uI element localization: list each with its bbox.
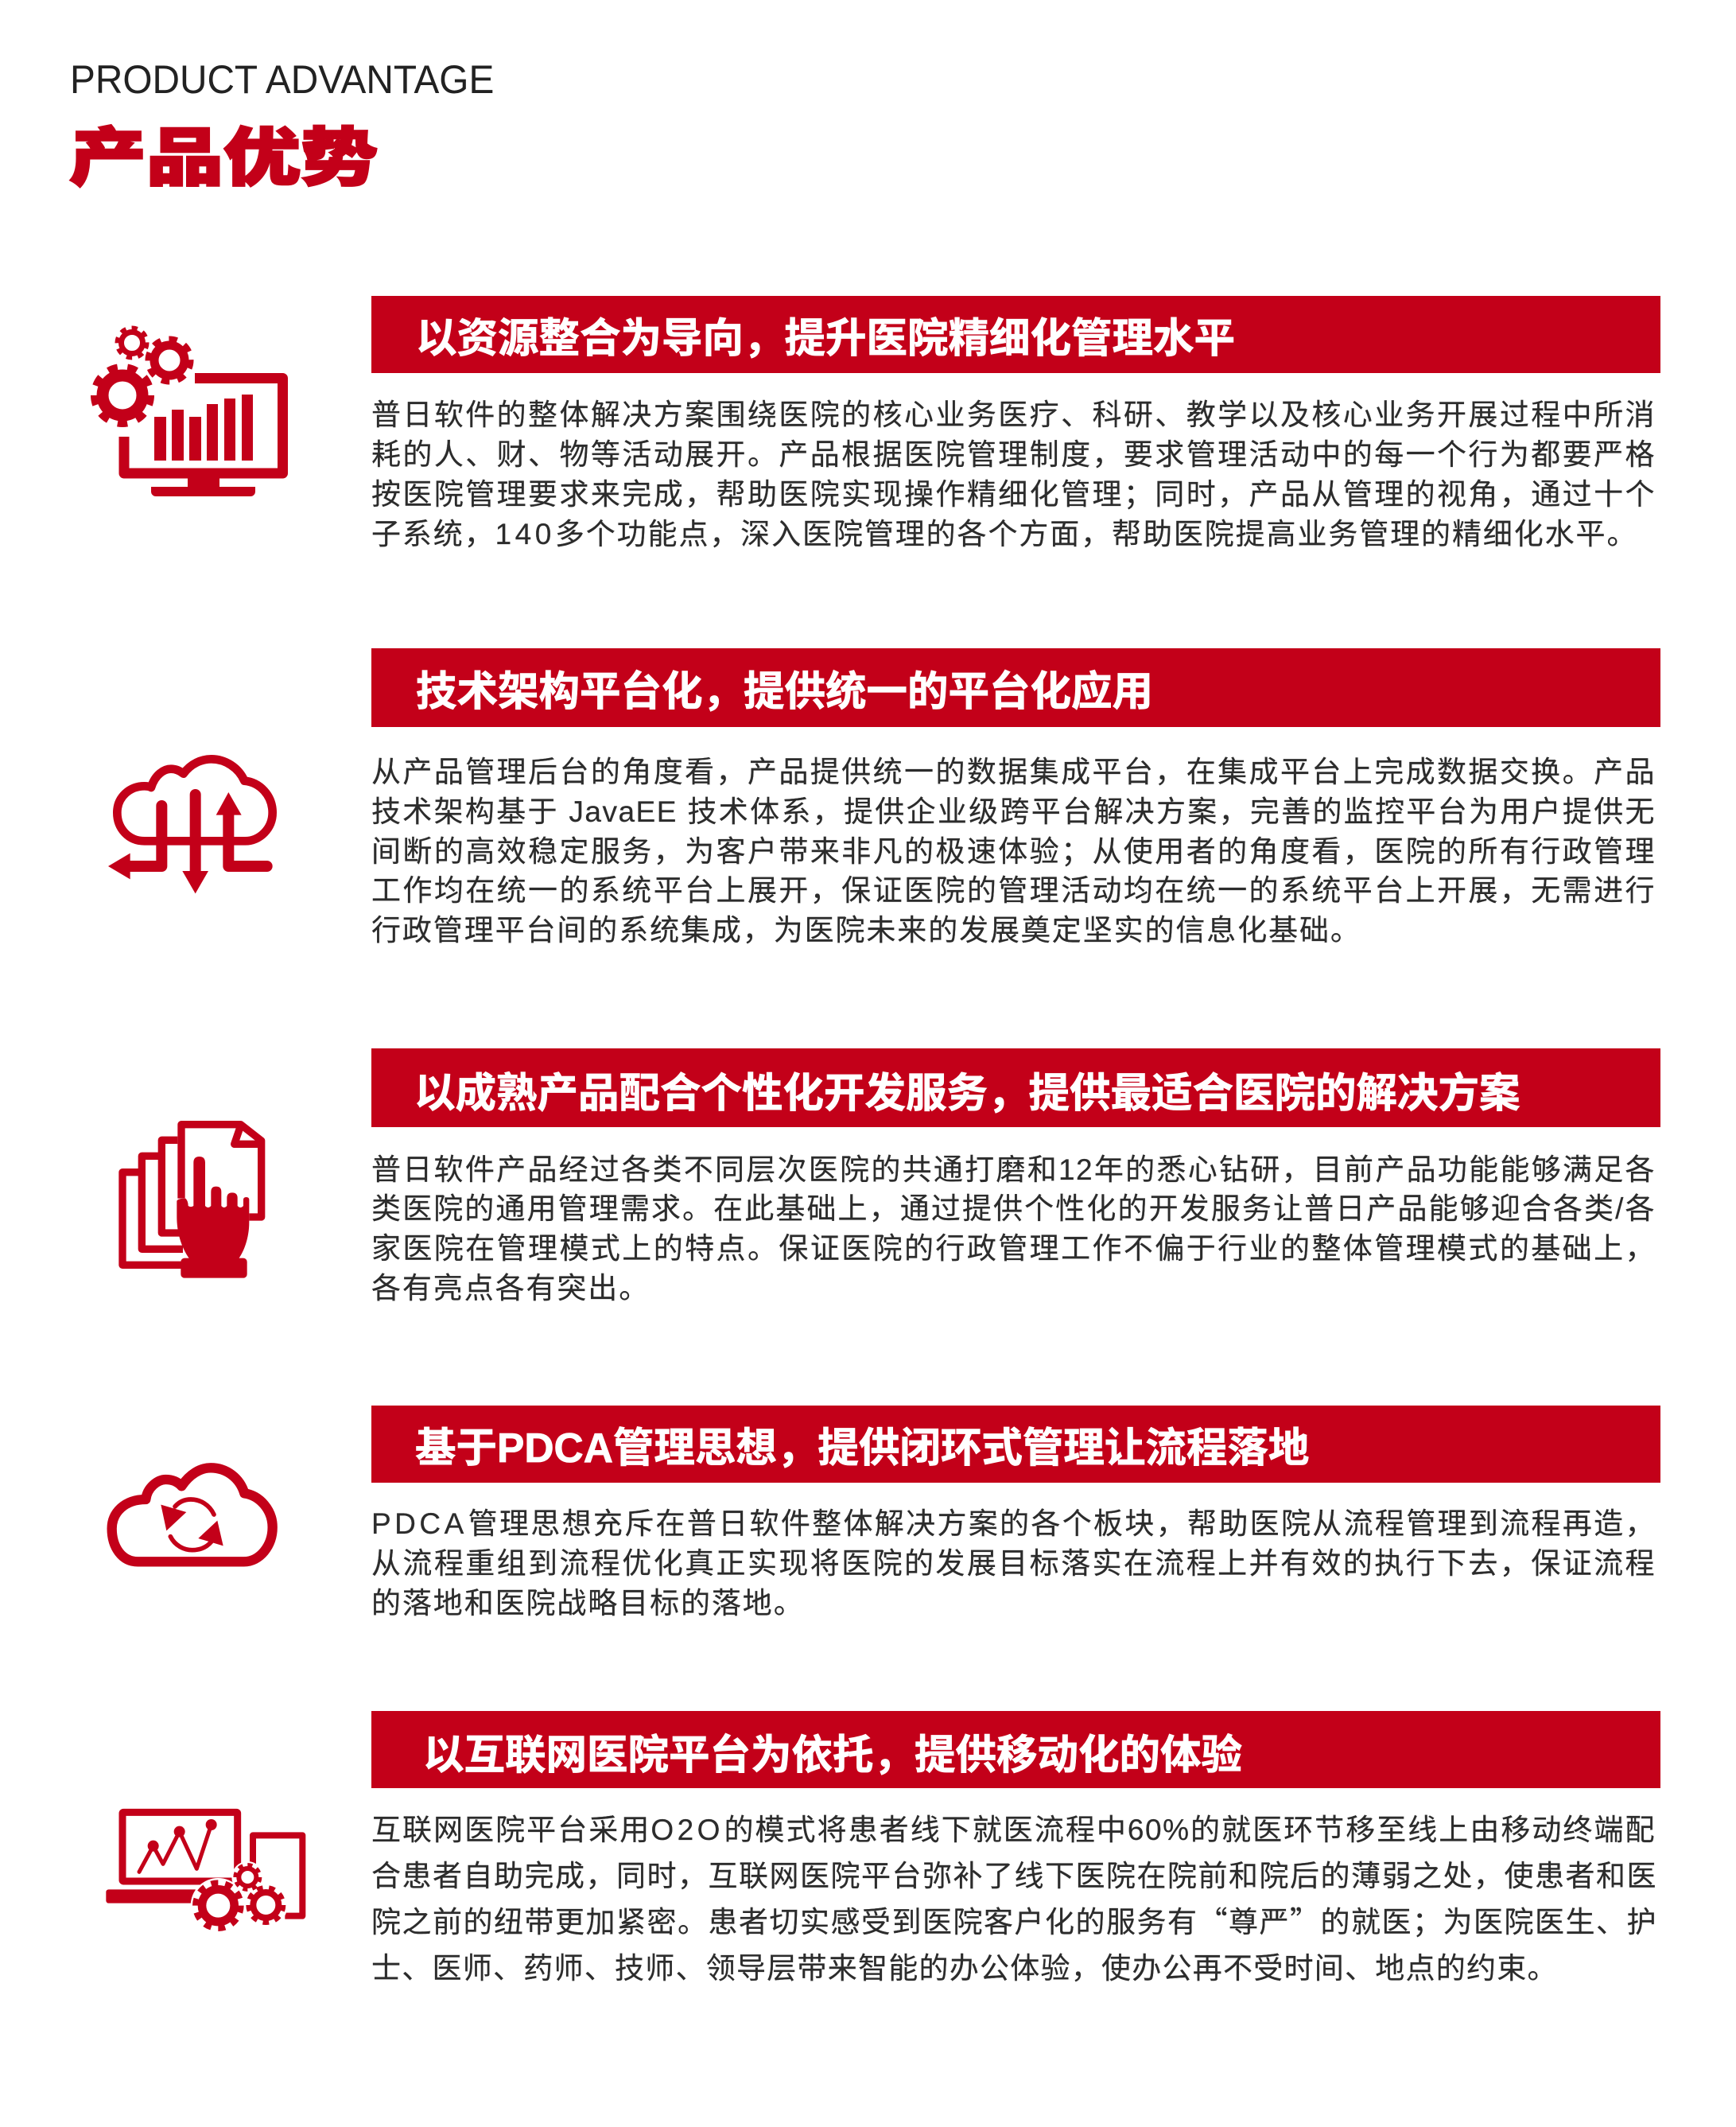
body text: 各有亮点各有突出。 — [371, 1272, 650, 1305]
body text: 的落地和医院战略目标的落地。 — [371, 1587, 805, 1620]
body text — [371, 756, 1656, 947]
body text: 类医院的通用管理需求。在此基础上，通过提供个性化的开发服务让普日产品能够迎合各类/各 — [371, 1192, 1656, 1225]
body text: 院之前的纽带更加紧密。患者切实感受到医院客户化的服务有“尊严”的就医；为医院医生、护 — [371, 1898, 1657, 1941]
section heading — [371, 296, 1660, 373]
body text: 普日软件产品经过各类不同层次医院的共通打磨和12年的悉心钻研，目前产品功能能够满足各 — [371, 1153, 1656, 1185]
body text — [371, 399, 1656, 550]
panel: PDCA management — [107, 1406, 1660, 1620]
body text: 从流程重组到流程优化真正实现将医院的发展目标落实在流程上并有效的执行下去，保证流程 — [371, 1547, 1656, 1580]
panel: resource integration — [91, 296, 1660, 550]
body text: 士、医师、药师、技师、领导层带来智能的办公体验，使办公再不受时间、地点的约束。 — [371, 1952, 1558, 1985]
icon: documents and hand — [118, 1121, 266, 1278]
body text: 按医院管理要求来完成，帮助医院实现操作精细化管理；同时，产品从管理的视角，通过十个 — [371, 478, 1656, 511]
panel: mature products and customization — [118, 1048, 1660, 1305]
body text: 普日软件的整体解决方案围绕医院的核心业务医疗、科研、教学以及核心业务开展过程中所消 — [371, 399, 1656, 431]
section heading: 基于PDCA管理思想，提供闭环式管理让流程落地 — [415, 1425, 1309, 1471]
body text — [371, 1814, 1657, 1985]
icon: laptop tablet and gears — [106, 1809, 305, 1931]
section heading — [371, 648, 1660, 727]
body text: 耗的人、财、物等活动展开。产品根据医院管理制度，要求管理活动中的每一个行为都要严格 — [371, 438, 1656, 471]
section heading — [371, 1711, 1660, 1788]
panel: internet hospital — [106, 1711, 1660, 1985]
section heading: 以互联网医院平台为依托，提供移动化的体验 — [423, 1732, 1242, 1778]
body text: 工作均在统一的系统平台上展开，保证医院的管理活动均在统一的系统平台上开展，无需进行 — [371, 874, 1656, 907]
panel: platform architecture — [108, 648, 1660, 947]
body text: 家医院在管理模式上的特点。保证医院的行政管理工作不偏于行业的整体管理模式的基础上， — [371, 1232, 1656, 1265]
section heading: 以资源整合为导向，提升医院精细化管理水平 — [416, 315, 1235, 361]
body text: 行政管理平台间的系统集成，为医院未来的发展奠定坚实的信息化基础。 — [371, 914, 1361, 947]
body text — [371, 1507, 1656, 1620]
body text: 间断的高效稳定服务，为客户带来非凡的极速体验；从使用者的角度看，医院的所有行政管理 — [371, 835, 1656, 868]
icon: monitor with gears — [91, 326, 288, 496]
body text: 技术架构基于 JavaEE 技术体系，提供企业级跨平台解决方案，完善的监控平台为用户提供无 — [371, 795, 1656, 828]
body text: 互联网医院平台采用O2O的模式将患者线下就医流程中60%的就医环节移至线上由移动终端配 — [371, 1814, 1656, 1846]
title: PRODUCT ADVANTAGE: PRODUCT ADVANTAGE — [70, 57, 494, 102]
icon: cloud with arrows — [108, 755, 277, 894]
body text: 子系统，140多个功能点，深入医院管理的各个方面，帮助医院提高业务管理的精细化水平。 — [371, 518, 1637, 550]
section heading — [371, 1048, 1660, 1127]
section heading — [371, 1406, 1660, 1483]
body text: 从产品管理后台的角度看，产品提供统一的数据集成平台，在集成平台上完成数据交换。产品 — [371, 756, 1656, 788]
body text: 合患者自助完成，同时，互联网医院平台弥补了线下医院在院前和院后的薄弱之处，使患者和医 — [371, 1860, 1657, 1892]
section heading: 技术架构平台化，提供统一的平台化应用 — [416, 668, 1153, 714]
body text — [371, 1153, 1656, 1305]
body text: PDCA管理思想充斥在普日软件整体解决方案的各个板块，帮助医院从流程管理到流程再造， — [371, 1507, 1656, 1540]
heading: 产品优势: 产品优势 — [69, 122, 378, 193]
section heading: 以成熟产品配合个性化开发服务，提供最适合医院的解决方案 — [414, 1070, 1520, 1116]
icon: cloud with refresh arrows — [107, 1463, 278, 1567]
